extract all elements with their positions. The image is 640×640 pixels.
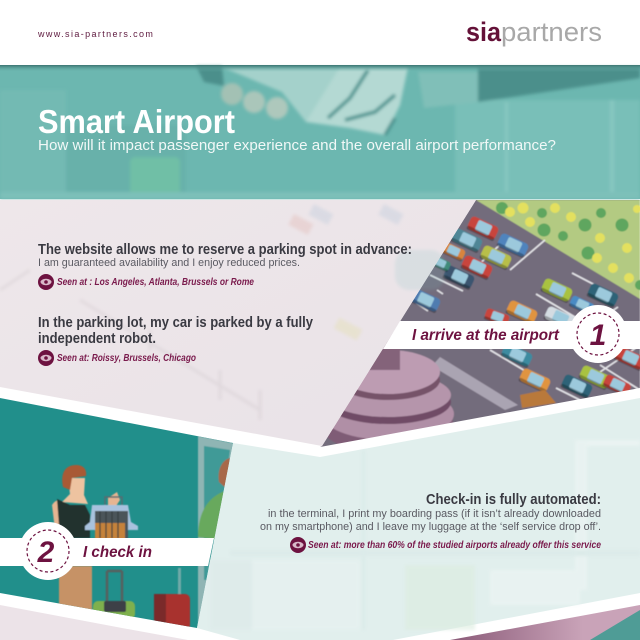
logo: sia partners: partners [501,17,602,47]
step 1 band: I arrive at the airport [412,327,560,344]
step 1 band [383,305,640,363]
seen at: robot: Seen at: Roissy, Brussels, Chicago [57,353,196,364]
header bar [0,0,640,65]
step 1 badge: 1 [590,319,606,352]
seen at: reservation: Seen at : Los Angeles, Atlanta, Brussels or Rome [57,277,254,288]
hero background: terminal and robot [0,66,640,199]
step 2 band [0,522,214,580]
doorway [198,436,233,630]
panel: check-in text background [197,398,640,640]
seen at: reservation [38,274,254,290]
panel: next section bottom left [0,605,188,640]
top shadow [0,65,640,72]
parking scene illustration [320,198,640,458]
text: robot parking: independent robot. [38,331,156,347]
text: robot parking [38,315,313,347]
logo: sia partners: sia [466,17,502,47]
faint terminal backdrop [210,440,640,630]
text: check-in automated [260,492,601,533]
pet carrier [85,497,138,539]
man in green [198,458,230,540]
text: parking reservation [38,242,412,269]
seen at: check-in: Seen at: more than 60% of the studied airports already offer this service [308,540,601,551]
step 2 band: I check in [83,544,152,561]
asphalt [320,198,640,458]
website url: www.sia-partners.com [37,29,154,39]
step 2 badge: 2 [37,536,55,569]
seen at: robot [38,350,196,366]
subtitle: How will it impact passenger experience and the overall airport performance? [38,137,556,154]
text: robot parking: In the parking lot, my car is parked by a fully [38,315,313,331]
text: check-in automated: in the terminal, I print my boarding pass (if it isn’t already downloaded [268,508,601,520]
panel: check-in illustration [0,398,233,630]
step 2 badge [19,522,77,580]
grass with trees [476,200,640,299]
terminal tower [328,349,454,444]
title: Smart Airport [38,103,235,140]
panel: next section bottom right [450,605,640,640]
panel: parking text background [0,200,476,446]
parking lines [416,240,640,400]
text: check-in automated: Check-in is fully automated: [426,492,601,508]
road strip [432,357,518,410]
woman with pet carrier [52,465,120,612]
seen at: check-in [290,537,601,553]
faint parking backdrop [0,204,445,420]
green suitcase [93,571,135,619]
text: check-in automated: on my smartphone) and I leave my luggage at the ‘self service drop off’. [260,521,601,533]
hero banner [0,65,640,199]
red suitcase [154,568,190,630]
text: parking reservation: I am guaranteed availability and I enjoy reduced prices. [38,257,300,269]
building corner [520,390,556,408]
step 1 badge [569,305,627,363]
cars [408,215,640,400]
text: parking reservation: The website allows me to reserve a parking spot in advance: [38,242,412,258]
